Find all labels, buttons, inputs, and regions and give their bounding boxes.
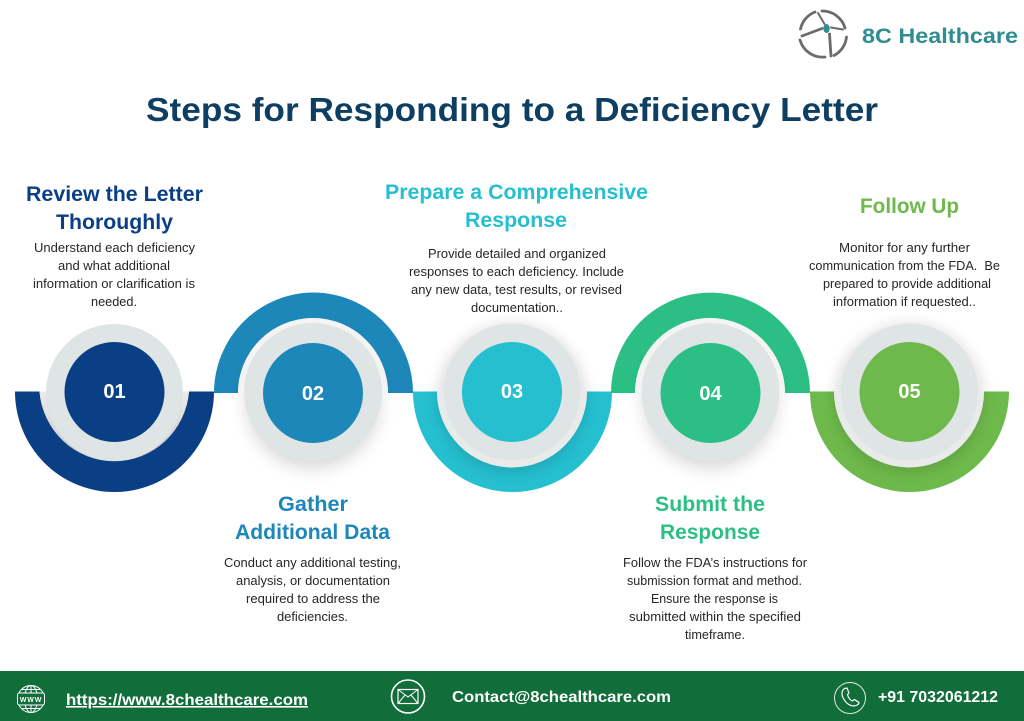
step 2 text: deficiencies. <box>277 610 348 624</box>
step 4 heading: Response <box>660 521 760 544</box>
icon: logo globe <box>800 11 846 57</box>
step 5 text: prepared to provide additional <box>823 277 991 291</box>
step 2 arc <box>214 293 413 393</box>
step 1 heading: Review the Letter <box>26 183 203 206</box>
icon: globe <box>18 686 44 712</box>
step 4 text: Ensure the response is <box>651 592 778 606</box>
step 5 marker: 05 <box>898 381 921 403</box>
icon: globe: WWW <box>20 697 42 704</box>
step 1 text: needed. <box>91 295 137 309</box>
step 3 heading: Prepare a Comprehensive <box>385 181 648 204</box>
step 4 text: submitted within the specified <box>629 610 801 624</box>
step 1 marker: 01 <box>103 381 126 403</box>
step 1 arc <box>15 392 214 492</box>
step 3 heading <box>385 181 648 232</box>
step 2 text: Conduct any additional testing, <box>224 556 401 570</box>
logo: 8C Healthcare <box>800 11 1018 57</box>
step 3 heading: Response <box>465 209 567 232</box>
step 5 marker <box>833 322 985 474</box>
step 3 text: documentation.. <box>471 301 563 315</box>
step 1 text: Understand each deficiency <box>34 241 196 255</box>
logo wordmark: 8C Healthcare <box>862 25 1018 48</box>
step 1 text <box>33 241 196 309</box>
step 4 marker: 04 <box>699 383 722 405</box>
step 5 text: communication from the FDA. Be <box>809 259 1000 273</box>
step 5 heading: Follow Up <box>860 195 959 218</box>
step 2 text: required to address the <box>246 592 380 606</box>
icon: envelope <box>392 680 424 713</box>
step 4 arc <box>611 293 810 393</box>
step 5 text: Monitor for any further <box>839 241 970 255</box>
step 5 text: information if requested.. <box>833 295 976 309</box>
icon: phone <box>834 682 866 714</box>
step 4 text: timeframe. <box>685 628 745 642</box>
step 4 text: Follow the FDA’s instructions for <box>623 556 807 570</box>
step 2 text: analysis, or documentation <box>236 574 390 588</box>
step 2 marker <box>238 318 388 468</box>
step 3 marker <box>436 322 588 474</box>
website link: https://www.8chealthcare.com <box>66 692 308 709</box>
step 2 heading <box>235 493 390 544</box>
step 4 text <box>623 556 807 642</box>
step 4 heading: Submit the <box>655 493 765 516</box>
step 1 text: and what additional <box>58 259 170 273</box>
step 3 text: responses to each deficiency. Include <box>409 265 624 279</box>
step 3 arc <box>413 392 612 492</box>
step 4 heading <box>655 493 765 544</box>
step 1 marker <box>40 324 189 461</box>
footer bar <box>0 671 1024 721</box>
step 2 marker: 02 <box>302 383 324 405</box>
step 3 text: any new data, test results, or revised <box>411 283 622 297</box>
step 3 text <box>409 247 624 315</box>
step 5 arc <box>810 392 1009 492</box>
step 4 text: submission format and method. <box>627 574 802 588</box>
step 5 text <box>809 241 1000 309</box>
step 2 heading: Gather <box>278 493 348 516</box>
phone number: +91 7032061212 <box>878 689 998 706</box>
step 1 text: information or clarification is <box>33 277 195 291</box>
email: Contact@8chealthcare.com <box>452 689 671 706</box>
step 3 text: Provide detailed and organized <box>428 247 606 261</box>
step 2 text <box>224 556 401 624</box>
step 4 marker <box>635 318 785 468</box>
step 3 marker: 03 <box>501 381 523 403</box>
title: Steps for Responding to a Deficiency Letter <box>146 91 878 128</box>
step 1 heading: Thoroughly <box>56 211 173 234</box>
step 2 heading: Additional Data <box>235 521 390 544</box>
step 1 heading <box>26 183 203 234</box>
